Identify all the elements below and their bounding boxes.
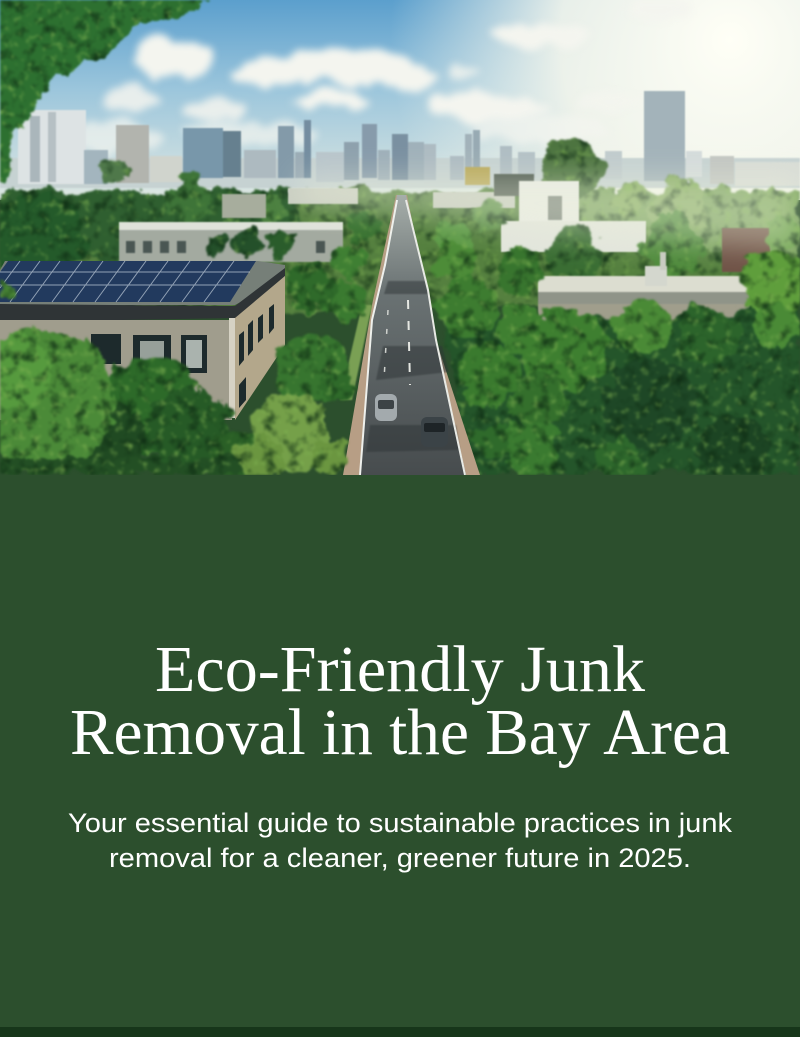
subtitle xyxy=(68,808,733,873)
left mid-rise with window row xyxy=(119,228,343,262)
footer strip xyxy=(0,1027,800,1037)
subtitle: removal for a cleaner, greener future in 2025. xyxy=(109,843,691,873)
title: Eco-Friendly Junk xyxy=(155,633,645,706)
title: Removal in the Bay Area xyxy=(70,696,730,769)
panel: dark green title block xyxy=(0,475,800,1037)
city skyline xyxy=(0,91,800,188)
hero photo: aerial view of a green city xyxy=(0,0,800,486)
street trees right of road xyxy=(435,242,800,486)
small leaves at building corner xyxy=(0,278,16,298)
foreground trees xyxy=(0,246,368,486)
subtitle: Your essential guide to sustainable practices in junk xyxy=(68,808,733,838)
title xyxy=(70,633,730,769)
distant tree line xyxy=(0,138,800,310)
grass strip beside road xyxy=(340,305,372,400)
haze over middle distance xyxy=(300,175,800,250)
background buildings xyxy=(119,174,770,272)
cars xyxy=(375,394,448,432)
right rooftop building xyxy=(538,252,750,324)
trees around background buildings xyxy=(0,194,798,286)
road xyxy=(343,195,480,475)
clouds xyxy=(86,21,580,158)
sky xyxy=(0,0,800,200)
upper-left foliage xyxy=(0,0,210,185)
solar-roof building xyxy=(0,261,285,420)
solar panels xyxy=(0,261,256,302)
